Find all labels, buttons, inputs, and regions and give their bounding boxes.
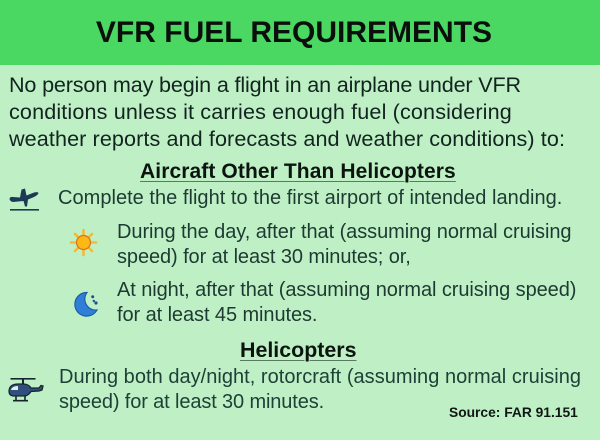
intro text bbox=[9, 72, 565, 151]
text: night requirement bbox=[117, 279, 576, 326]
title banner bbox=[0, 0, 600, 64]
text: night requirement: for at least 45 minutes. bbox=[117, 304, 317, 326]
icon: moon bbox=[74, 292, 98, 317]
icon: airplane departure bbox=[10, 188, 39, 211]
intro text: weather reports and forecasts and weather conditions) to: bbox=[9, 126, 565, 151]
heading: helicopters: Helicopters bbox=[240, 338, 356, 362]
text: first airport: Complete the flight to the first airport of intended landing. bbox=[58, 187, 562, 209]
text: day requirement bbox=[117, 221, 572, 268]
icon: sun bbox=[70, 228, 98, 256]
text: day requirement: During the day, after that (assuming normal cruising bbox=[117, 221, 572, 243]
text: night requirement: At night, after that (assuming normal cruising speed) bbox=[117, 279, 576, 301]
text: day requirement: speed) for at least 30 minutes; or, bbox=[117, 246, 411, 268]
text: helicopter requirement bbox=[59, 366, 581, 412]
intro text: No person may begin a flight in an airplane under VFR bbox=[9, 72, 521, 97]
title: VFR FUEL REQUIREMENTS bbox=[96, 16, 492, 49]
intro text: conditions unless it carries enough fuel (considering bbox=[9, 99, 512, 124]
heading: aircraft other than helicopters: Aircraft Other Than Helicopters bbox=[140, 160, 456, 183]
icon: helicopter bbox=[8, 378, 44, 402]
source note: Source: FAR 91.151 bbox=[449, 405, 578, 420]
text: helicopter requirement: speed) for at least 30 minutes. bbox=[59, 390, 324, 412]
text: helicopter requirement: During both day/night, rotorcraft (assuming normal cruising bbox=[59, 366, 581, 388]
